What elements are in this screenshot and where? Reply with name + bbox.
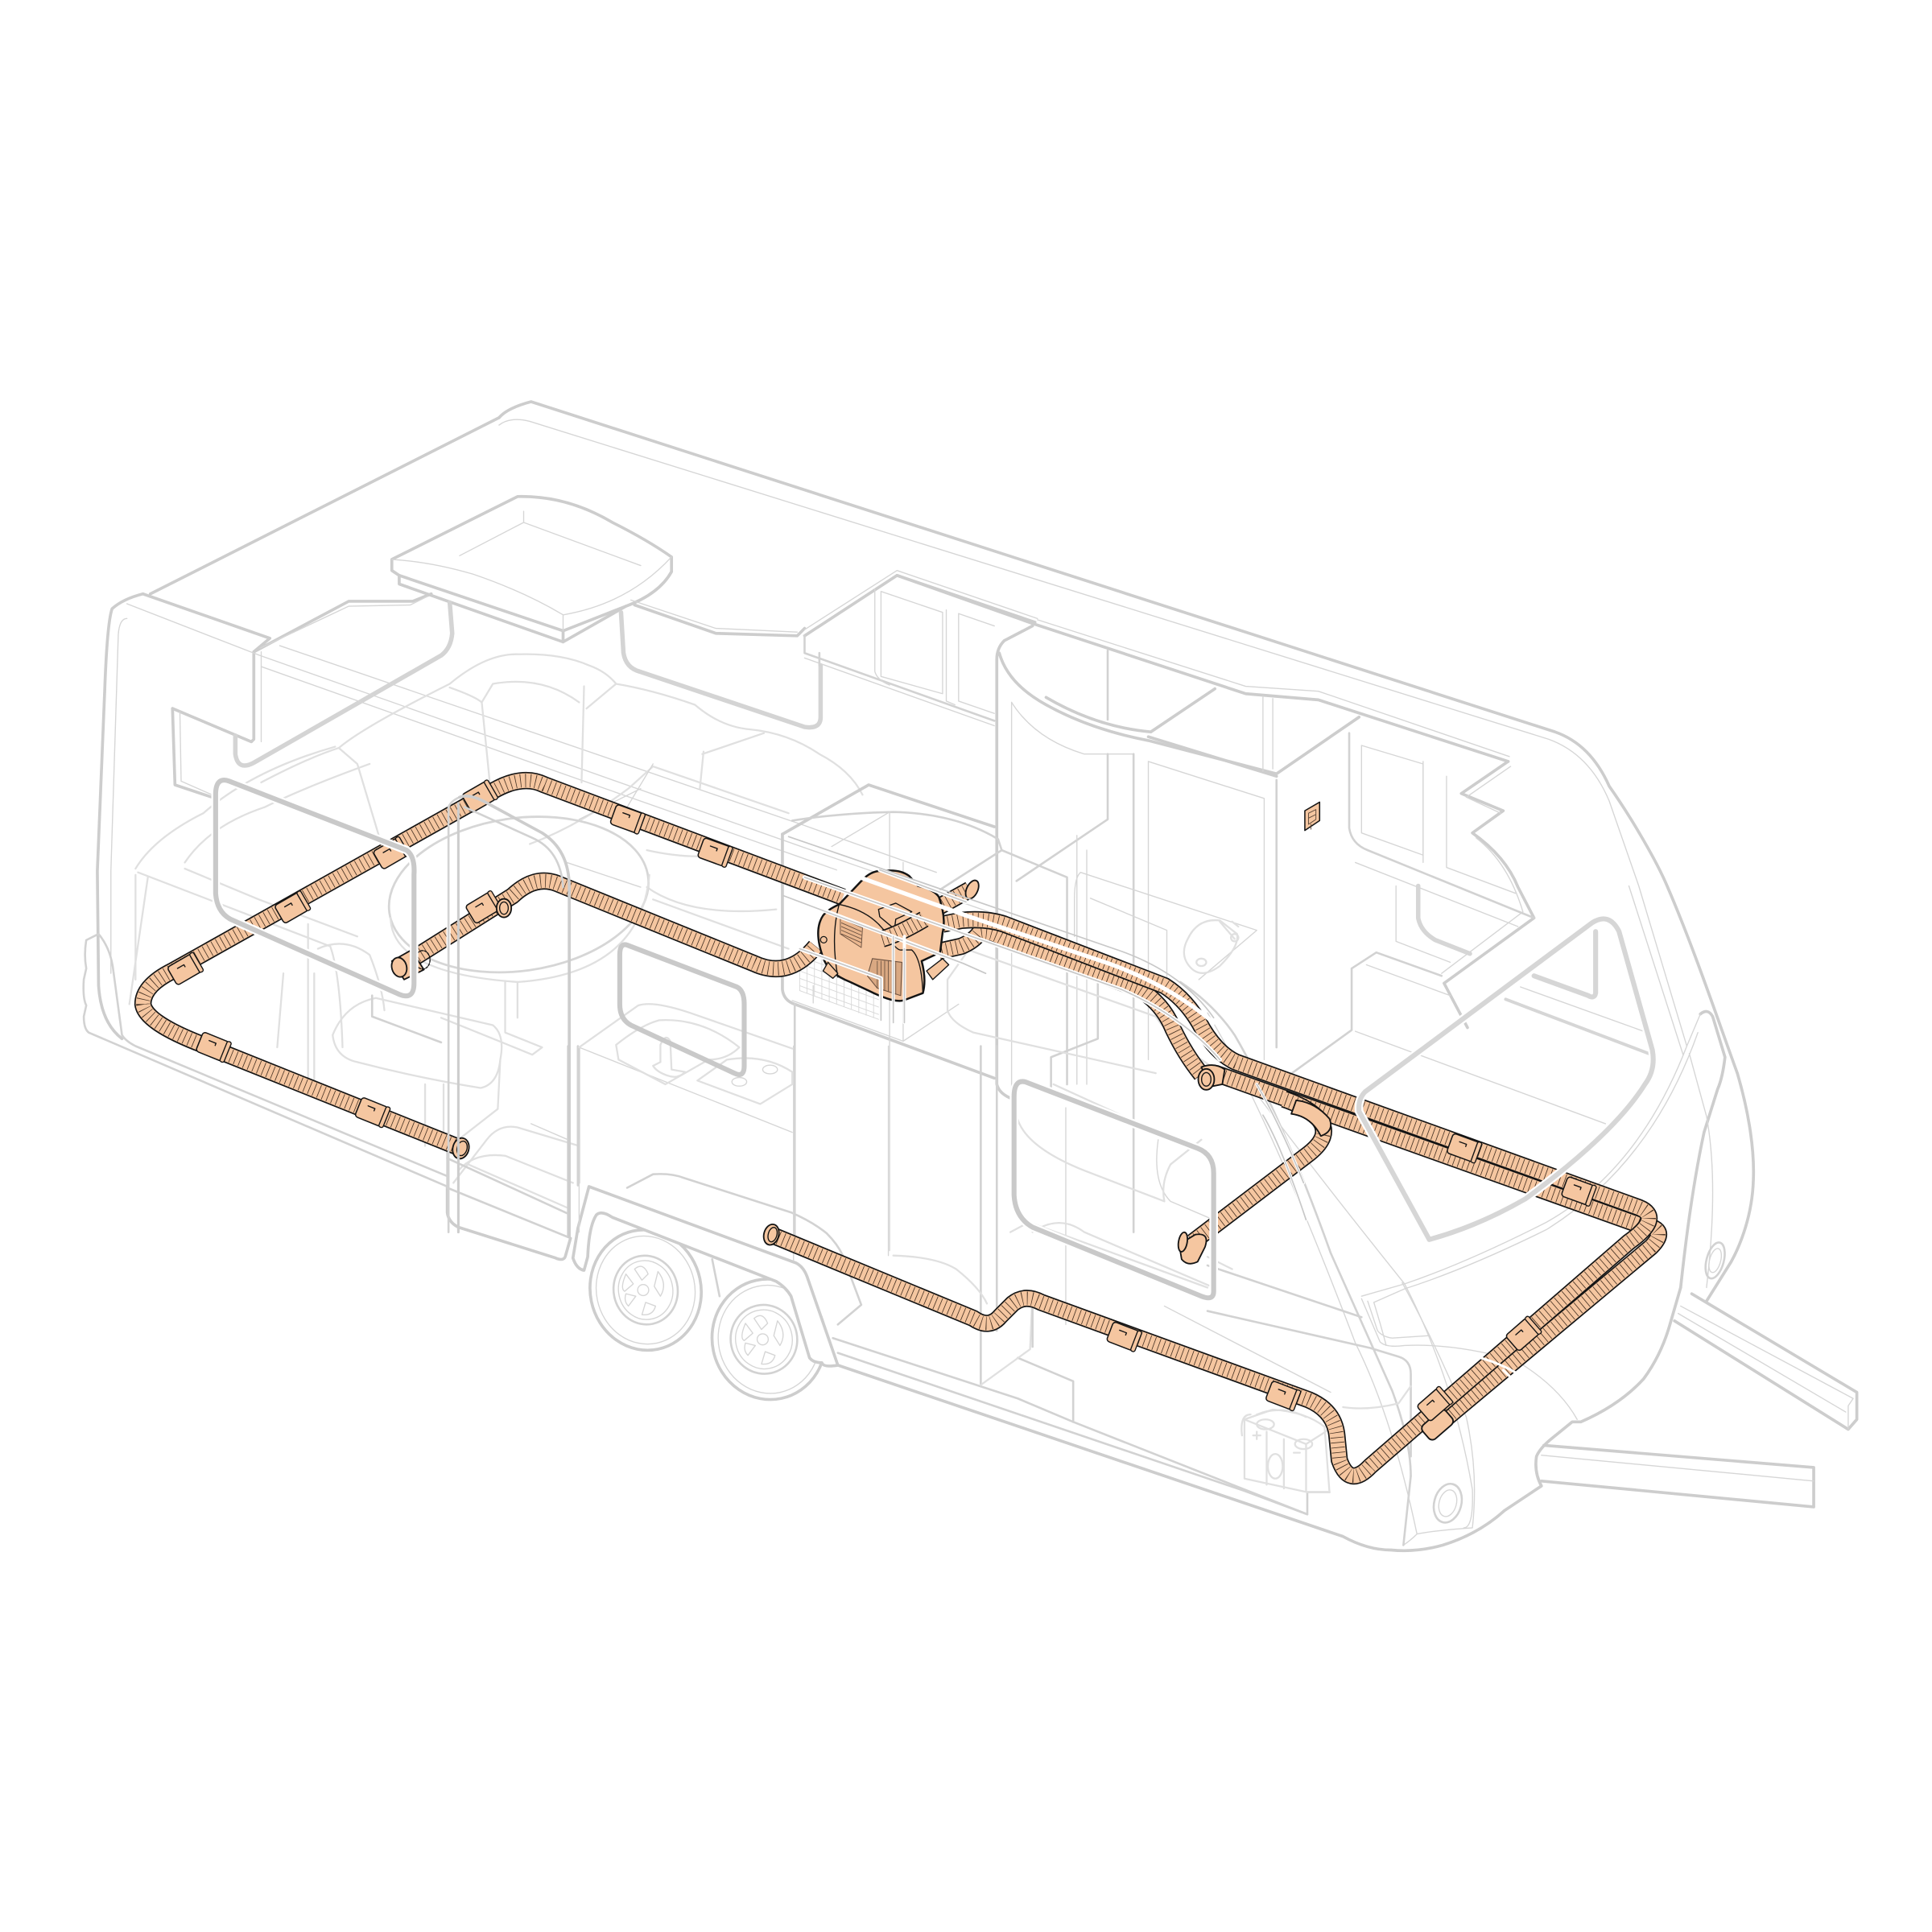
front windshield window: [1359, 919, 1653, 1240]
window: front side: [1014, 1081, 1214, 1298]
duct: main loop from unit around front to lower side: [774, 919, 1649, 1476]
front right cabinets and upper panel: [1277, 733, 1649, 1124]
blower heater unit: [818, 870, 949, 1001]
lower grille: [868, 959, 902, 996]
benches and rear lounge seating: [130, 654, 862, 1208]
roof vent: [392, 497, 671, 642]
front band: [835, 904, 923, 993]
lower side skirt: [838, 1287, 1681, 1550]
duct: dinette loop: [413, 881, 815, 968]
A-frame drawbar: [1542, 1294, 1857, 1507]
window: rear side: [216, 780, 414, 996]
duct: lower unit run to T: [939, 932, 1201, 1075]
top step block: [878, 903, 912, 929]
internal elbow duct: [882, 919, 924, 939]
caravan shell outline: [84, 402, 1753, 1550]
wheel arch fender: [573, 1174, 861, 1366]
side door frame: [448, 1133, 571, 1259]
duct: rear lounge loop: [143, 781, 843, 1147]
upper vent: [840, 918, 862, 947]
duct: branch to front elbow: [1193, 1099, 1323, 1242]
duct: top stub: [939, 890, 970, 907]
windshield window: [1534, 931, 1596, 997]
duct end caps and outlets: [390, 878, 1455, 1442]
heating duct network: [143, 779, 1658, 1476]
A pillar: [1180, 982, 1411, 1476]
left bumper: [84, 934, 448, 1187]
tandem wheels: [579, 1220, 837, 1410]
kitchen counter and sink: [531, 1004, 792, 1232]
washroom vanity basin: [947, 873, 1257, 1073]
control panel: [1305, 802, 1319, 831]
overlay frame lines passing in front of ducts: [783, 836, 1534, 1400]
long ceiling lines: [127, 604, 1084, 956]
ceiling recess and left cabinet: [143, 594, 820, 797]
duct: lower second pair run: [1215, 1073, 1658, 1430]
diffuser grille mesh: [799, 949, 881, 1020]
end cylinder: [1420, 1408, 1455, 1442]
foot bracket: [823, 962, 838, 978]
side screw: [820, 936, 827, 943]
housing: [818, 870, 943, 1001]
central bed box framing: [568, 785, 1098, 1385]
left roof edge: [151, 418, 499, 594]
wardrobe and fridge tower: [997, 626, 1359, 1232]
marker lights: [1430, 1480, 1466, 1525]
roof edge: [499, 402, 1753, 1301]
window: mid side: [620, 944, 744, 1075]
door arch frame: [448, 796, 569, 1237]
overhead kitchen cabinets: [804, 571, 1509, 762]
front bunk and lower panels: [1010, 1084, 1411, 1456]
dinette table: [379, 801, 658, 1055]
front nose panels: [1180, 982, 1728, 1545]
battery: [1241, 1410, 1330, 1492]
sleeve connectors: [167, 779, 1597, 1411]
